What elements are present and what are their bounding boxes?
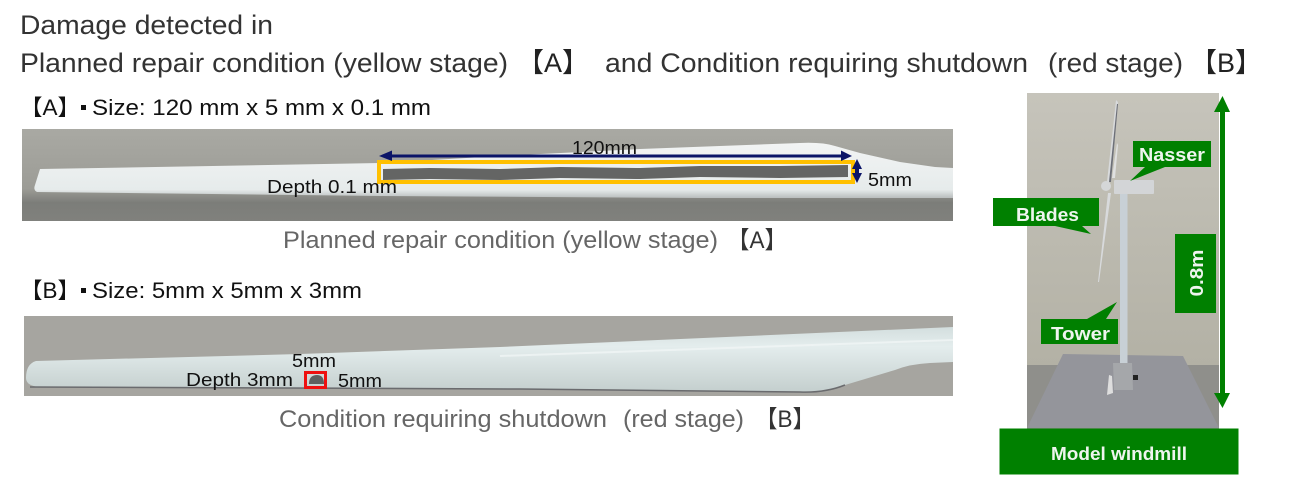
heading: size B: Size: 5mm x 5mm x 3mm — [92, 278, 362, 303]
double arrow: 0.8m height — [1214, 96, 1230, 408]
tower foot — [1113, 363, 1133, 390]
title: 【A】 — [517, 48, 589, 78]
label: top 5mm: 5mm — [292, 351, 336, 371]
title — [20, 10, 1262, 78]
blade A — [34, 143, 953, 198]
title: (red stage) — [1048, 48, 1183, 78]
panel: model windmill photo — [1027, 93, 1219, 429]
caption B: (red stage) — [623, 406, 744, 433]
callout: Tower — [1041, 302, 1118, 344]
floor — [1027, 365, 1219, 429]
callout: Nasser: Nasser — [1139, 145, 1205, 165]
title: Planned repair condition (yellow stage) — [20, 48, 508, 78]
hub — [1101, 181, 1111, 191]
caption B: Condition requiring shutdown — [279, 406, 607, 433]
rear blade — [1112, 143, 1118, 178]
label: 120mm: 120mm — [572, 138, 637, 158]
label: depth 3mm: Depth 3mm — [186, 370, 293, 390]
arrow: 5mm width — [852, 159, 862, 183]
title: 【B】 — [1190, 48, 1262, 78]
yellow highlight box — [379, 162, 853, 182]
label: Model windmill — [1000, 428, 1238, 474]
caption B: 【B】 — [755, 406, 815, 433]
title: and Condition requiring shutdown — [605, 48, 1028, 78]
arrow: 120mm length — [379, 150, 852, 161]
label: 5mm: 5mm — [868, 170, 912, 190]
blade B highlight — [500, 340, 953, 356]
callout: Blades — [993, 198, 1099, 234]
label: depth 0.1 mm: Depth 0.1 mm — [267, 177, 397, 197]
heading: size B: 【B】 — [20, 278, 80, 303]
tower — [1120, 193, 1128, 367]
blade B lower edge — [30, 385, 845, 392]
caption A: Planned repair condition (yellow stage) — [283, 227, 718, 254]
heading: size A: Size: 120 mm x 5 mm x 0.1 mm — [92, 95, 431, 120]
label: Model windmill: Model windmill — [1051, 444, 1187, 464]
base plate — [1027, 354, 1219, 428]
photo background A — [22, 129, 953, 221]
wall — [1027, 93, 1219, 365]
heading: size A: 【A】 — [20, 95, 80, 120]
height label 0.8m — [1175, 234, 1216, 313]
panel: blade photo A — [22, 129, 953, 221]
nacelle — [1114, 180, 1154, 194]
small white strap — [1107, 375, 1113, 395]
dark blade face — [1109, 104, 1118, 182]
title: Damage detected in — [20, 10, 273, 40]
label: right 5mm: 5mm — [338, 371, 382, 391]
damage strip — [383, 165, 848, 180]
caption B — [279, 406, 815, 433]
height label 0.8m: 0.8m — [1187, 250, 1207, 296]
caption A: 【A】 — [727, 227, 787, 254]
panel: blade photo B — [24, 316, 953, 396]
callout: Nasser — [1130, 141, 1211, 181]
red damage box — [306, 372, 326, 388]
blade B — [26, 327, 953, 392]
photo background B — [24, 316, 953, 396]
callout: Blades: Blades — [1016, 205, 1079, 225]
blades — [1098, 100, 1118, 282]
knob — [1133, 375, 1138, 380]
callout: Tower: Tower — [1051, 324, 1110, 344]
